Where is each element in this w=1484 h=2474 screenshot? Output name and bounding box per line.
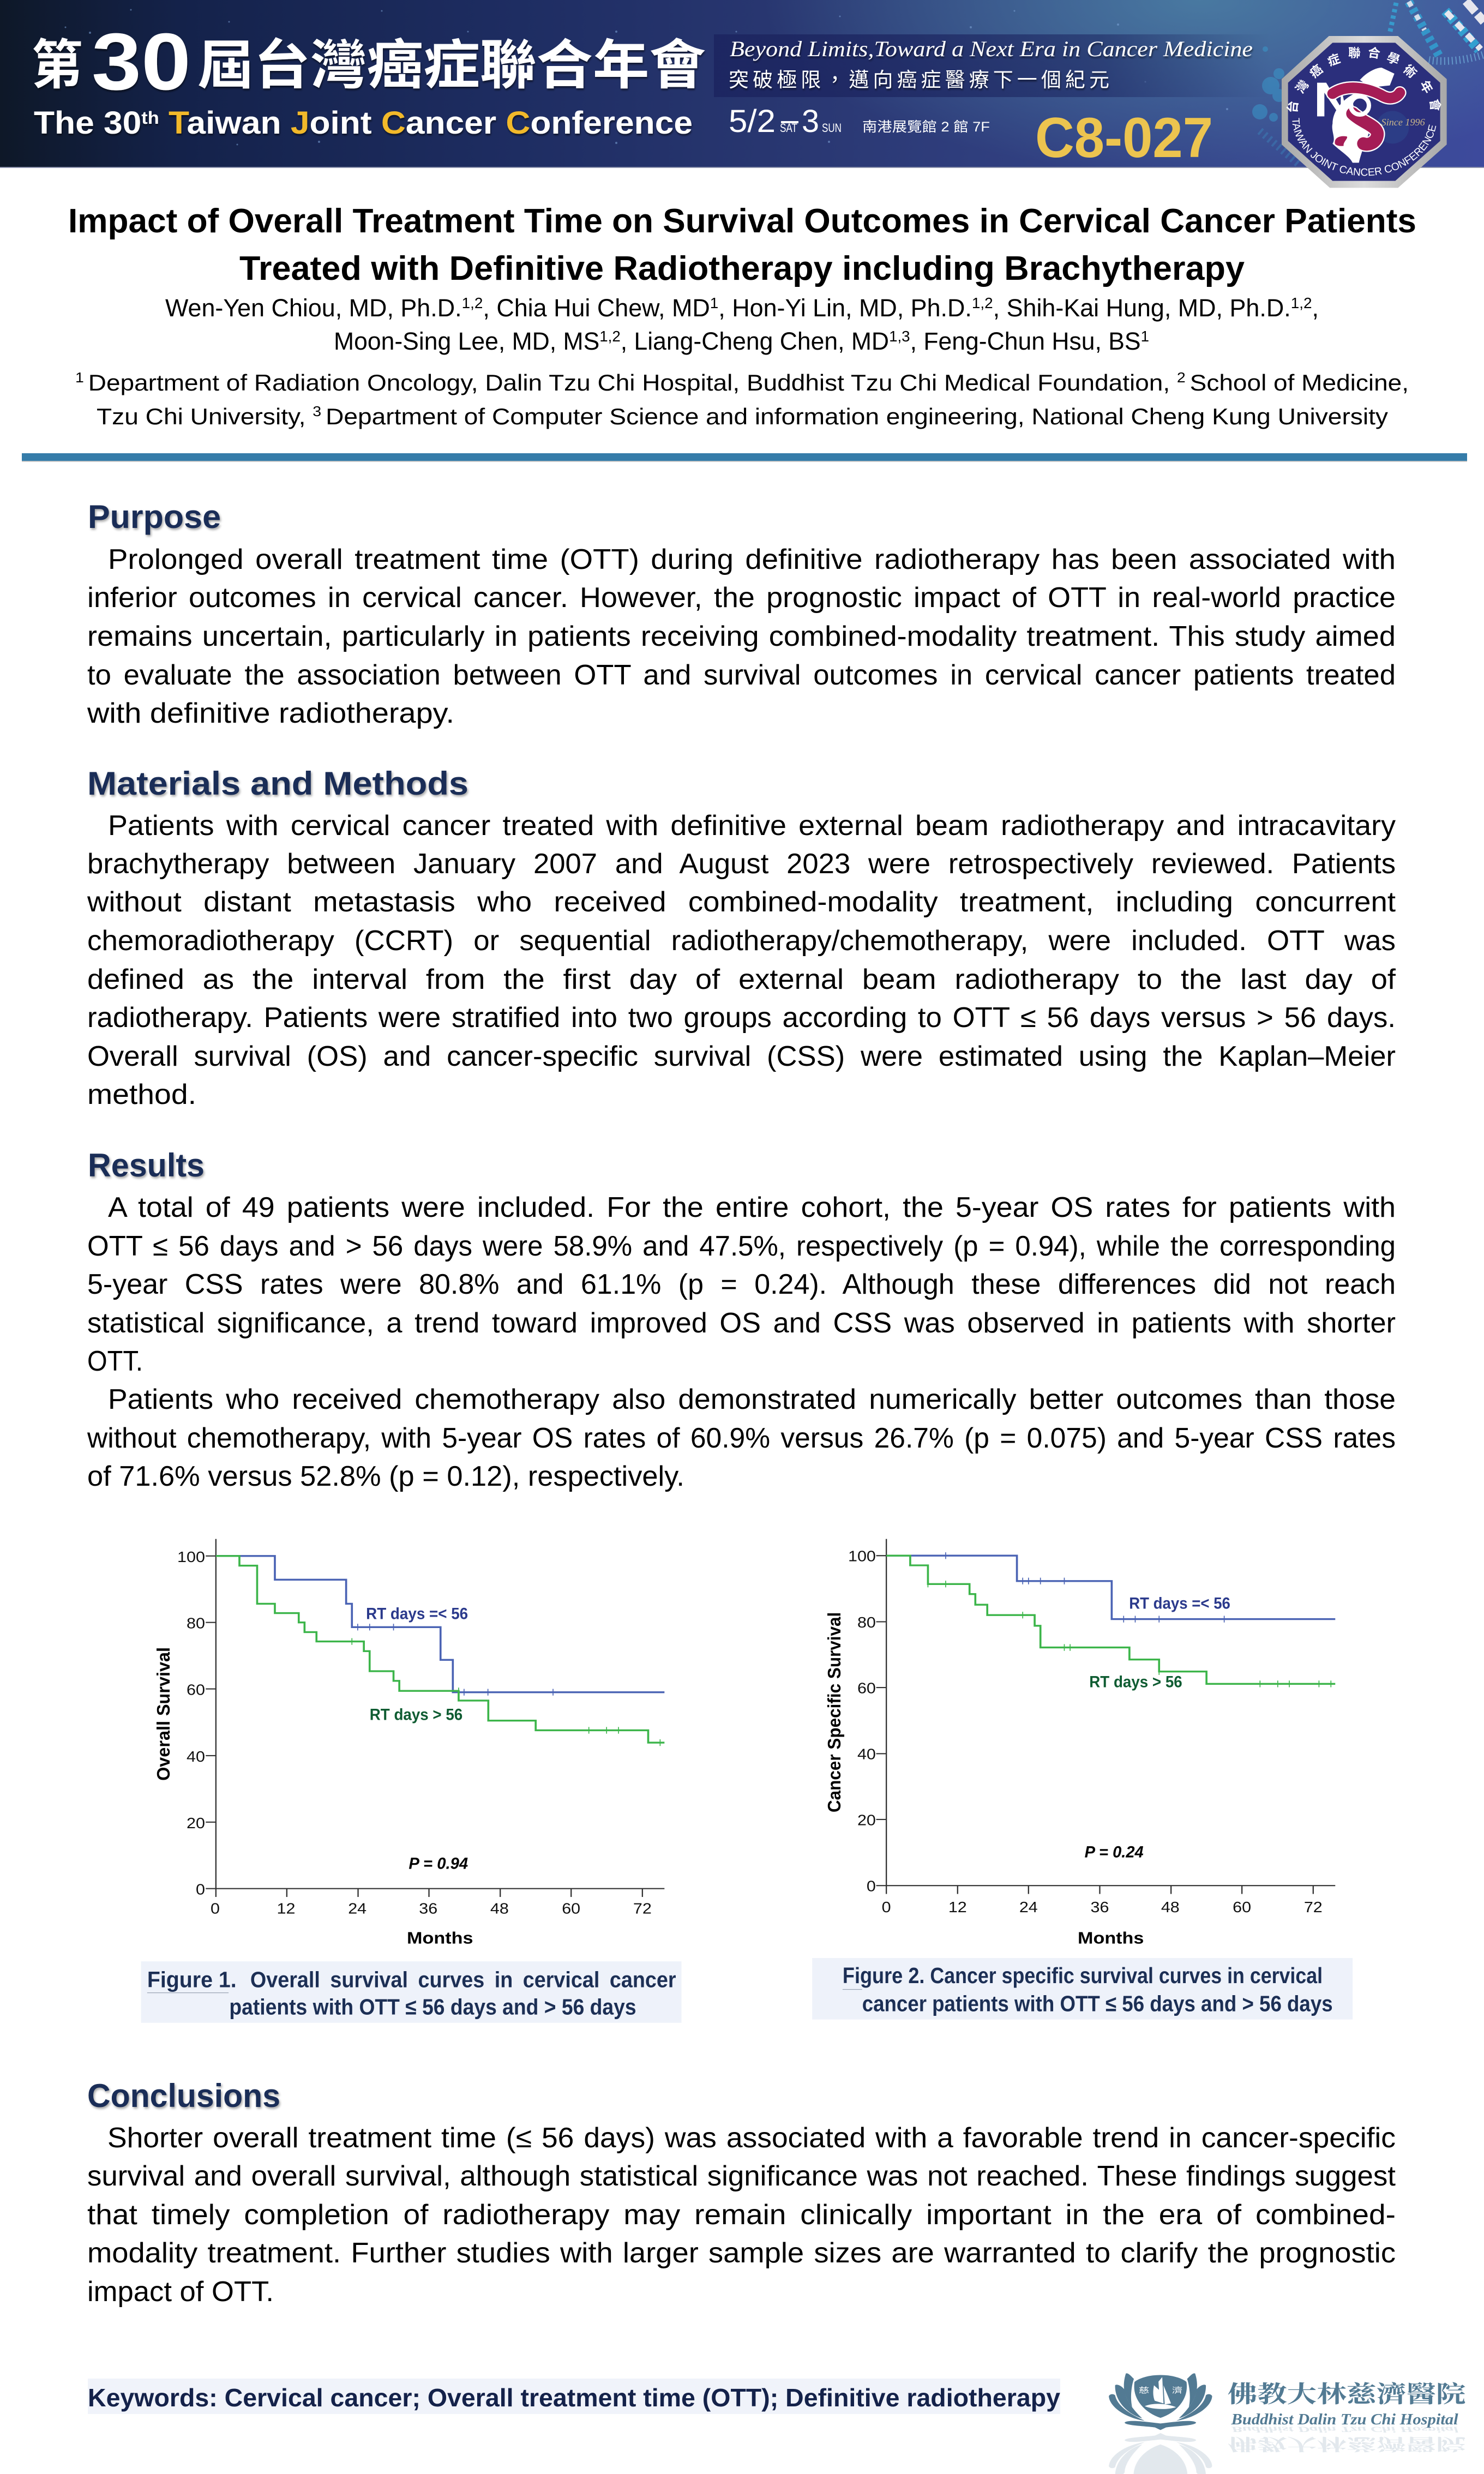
- axis title: Months, figure 2: Months: [1078, 1929, 1144, 1947]
- heading: Purpose: Purpose: [88, 499, 221, 535]
- text: Results: OTT ≤ 56 days and > 56 days were 58.9% and 47.5%, respectively (p = 0.94), while the corresponding: [87, 1230, 1396, 1262]
- label: RT days =< 56: RT days =< 56: [366, 1605, 468, 1623]
- text: Conclusions: that timely completion of radiotherapy may remain clinically important in the era of combined-: [87, 2199, 1396, 2231]
- p value: figure 2: P = 0.24: [1085, 1844, 1144, 1861]
- text: Purpose: inferior outcomes in cervical cancer. However, the prognostic impact of OTT in real-world practice: [87, 582, 1396, 614]
- tick labels: figure 2: 24: [1019, 1899, 1038, 1916]
- affiliations: [75, 369, 1409, 429]
- figure 2: cancer specific survival chart: [812, 1539, 1353, 2020]
- authors: [165, 294, 1319, 355]
- text: Conclusions: impact of OTT.: [87, 2276, 274, 2308]
- p value: figure 1: P = 0.94: [408, 1855, 468, 1872]
- logo ring text in Chinese: 灣: [1293, 77, 1312, 95]
- tick labels: figure 2: 48: [1161, 1899, 1180, 1916]
- label: RT days =< 56, figure 2: RT days =< 56: [1129, 1595, 1230, 1612]
- hospital logo: [1109, 2373, 1465, 2474]
- axis title: Months: Months: [407, 1929, 473, 1947]
- affiliations: Tzu Chi University, 3 Department of Computer Science and information engineering, National Cheng Kung University: [97, 403, 1388, 429]
- tick labels: figure 1: 48: [490, 1900, 509, 1917]
- label: RT days > 56, figure 2: RT days > 56: [1089, 1673, 1182, 1691]
- tick labels: figure 1: 12: [277, 1900, 296, 1917]
- tick labels: figure 1: 20: [187, 1815, 205, 1832]
- poster title: Impact of Overall Treatment Time on Survival Outcomes in Cervical Cancer Patients: [68, 202, 1416, 240]
- text: Results: Patients who received chemotherapy also demonstrated numerically better outcomes than those: [108, 1384, 1396, 1415]
- conference title in Chinese: 30: [92, 17, 191, 107]
- curve: RT days > 56, figure 2: [886, 1556, 1335, 1687]
- lotus emblem: [1109, 2373, 1212, 2430]
- affiliations: 1 Department of Radiation Oncology, Dalin Tzu Chi Hospital, Buddhist Tzu Chi Medical Foundation, 2 School of Medicine,: [75, 369, 1409, 395]
- logo ring text in Chinese: 會: [1427, 98, 1443, 112]
- text: Results: OTT.: [87, 1346, 143, 1377]
- text: Purpose: Prolonged overall treatment time (OTT) during definitive radiotherapy has been associated with: [108, 544, 1396, 575]
- text: Purpose: [87, 544, 1396, 729]
- caption band: figure 2: cancer patients with OTT ≤ 56 days and > 56 days: [862, 1991, 1333, 2016]
- text: Purpose: to evaluate the association between OTT and survival outcomes in cervical cancer patients treated: [87, 659, 1396, 691]
- logo ring text in Chinese: 台: [1285, 100, 1300, 113]
- conference title in English: The 30 th Taiwan Joint Cancer Conference: [34, 105, 693, 141]
- text: Materials and Methods: defined as the interval from the first day of external beam radiotherapy to the last day of: [87, 964, 1396, 995]
- text: Conclusions: [87, 2122, 1396, 2308]
- keywords band: Keywords: Cervical cancer; Overall treatment time (OTT); Definitive radiotherapy: [88, 2383, 1060, 2412]
- tick labels: figure 1: 100: [177, 1548, 205, 1566]
- caption band: figure 2: Cancer specific survival curves in cervical: [930, 1963, 1323, 1988]
- authors: Wen-Yen Chiou, MD, Ph.D.1,2, Chia Hui Chew, MD1, Hon-Yi Lin, MD, Ph.D.1,2, Shih-Kai Hung, MD, Ph.D.1,2,: [165, 294, 1319, 322]
- text: Materials and Methods: Overall survival (OS) and cancer-specific survival (CSS) were estimated using the Kaplan–Meier: [87, 1041, 1396, 1072]
- tick labels: figure 1: 72: [633, 1900, 652, 1917]
- logo ring text in Chinese: 年: [1417, 78, 1435, 96]
- label: RT days > 56: RT days > 56: [370, 1706, 462, 1724]
- conference theme box: 突破極限，邁向癌症醫療下一個紀元: [729, 69, 1109, 91]
- logo reflection: 佛教大林慈濟醫院: [1228, 2434, 1465, 2458]
- text: Materials and Methods: [87, 810, 1396, 1110]
- caption band: figure 1: Figure 1.: [147, 1967, 237, 1992]
- caption band: figure 1: [141, 1961, 681, 2023]
- conference theme box: Beyond Limits,Toward a Next Era in Cancer Medicine: [730, 37, 1253, 61]
- authors: Moon-Sing Lee, MD, MS1,2, Liang-Cheng Chen, MD1,3, Feng-Chun Hsu, BS1: [334, 327, 1149, 355]
- text: Results: [87, 1192, 1396, 1492]
- tick labels: figure 2: 40: [857, 1746, 876, 1763]
- hospital name in Chinese: 佛教大林慈濟醫院: [1228, 2375, 1465, 2409]
- conference logo: [1282, 36, 1447, 188]
- date and venue: SAT: [780, 121, 797, 135]
- tick labels: figure 1: 80: [187, 1615, 205, 1632]
- curve: RT days =< 56: [216, 1556, 664, 1696]
- logo ring text in Chinese: [1285, 45, 1443, 113]
- date and venue: [729, 104, 990, 139]
- poster title: Treated with Definitive Radiotherapy including Brachytherapy: [239, 250, 1245, 287]
- curve: RT days =< 56, figure 2: [886, 1552, 1335, 1623]
- caption band: figure 2: [812, 1958, 1353, 2020]
- tick labels: figure 2: 80: [857, 1614, 876, 1631]
- caption band: figure 1: patients with OTT ≤ 56 days and > 56 days: [229, 1995, 636, 2019]
- tick labels: figure 2: 36: [1091, 1899, 1109, 1916]
- text: Purpose: remains uncertain, particularly in patients receiving combined-modality treatment. This study aimed: [87, 621, 1396, 652]
- axis title: Overall Survival: Overall Survival: [153, 1647, 173, 1781]
- logo since text: Since 1996: [1381, 117, 1425, 128]
- text: Conclusions: modality treatment. Further studies with larger sample sizes are warranted to clarify the prognostic: [87, 2237, 1396, 2269]
- curve: RT days > 56: [216, 1556, 664, 1746]
- tick labels: figure 1: 40: [187, 1748, 205, 1766]
- text: Materials and Methods: without distant metastasis who received combined-modality treatment, including concurrent: [87, 886, 1396, 918]
- logo map and ribbon: [1317, 68, 1400, 163]
- text: Materials and Methods: brachytherapy between January 2007 and August 2023 were retrospectively reviewed. Patients: [87, 848, 1396, 880]
- logo ring text in Chinese: 症: [1326, 51, 1342, 69]
- conference title in Chinese: 屆台灣癌症聯合年會: [197, 35, 706, 95]
- lotus emblem: 濟: [1172, 2386, 1182, 2395]
- axis title: Cancer Specific Survival: Cancer Specific Survival: [824, 1612, 844, 1812]
- date and venue: 3: [802, 104, 819, 139]
- tick labels: figure 1: 36: [419, 1900, 437, 1917]
- text: Results: 5-year CSS rates were 80.8% and 61.1% (p = 0.24). Although these differences did not reach: [87, 1269, 1396, 1300]
- conference theme box: [714, 34, 1270, 97]
- text: Results: without chemotherapy, with 5-year OS rates of 60.9% versus 26.7% (p = 0.075) and 5-year CSS rates: [87, 1422, 1396, 1454]
- tick labels: figure 1: [177, 1548, 652, 1917]
- caption band: figure 2: Figure 2.: [843, 1963, 924, 1988]
- tick labels: figure 1: 0: [196, 1881, 205, 1898]
- text: Purpose: with definitive radiotherapy.: [87, 698, 454, 729]
- text: Results: statistical significance, a trend toward improved OS and CSS was observed in patients with shorter: [87, 1307, 1396, 1339]
- conference title in Chinese: [32, 17, 706, 107]
- date and venue: SUN: [822, 121, 842, 135]
- DNA helix decoration: [1252, 1, 1484, 164]
- figure 1: overall survival chart: [141, 1539, 681, 2023]
- heading: Materials and Methods: Materials and Methods: [87, 765, 468, 802]
- text: Materials and Methods: chemoradiotherapy (CCRT) or sequential radiotherapy/chemotherapy, were included. OTT was: [87, 925, 1396, 957]
- logo reflection: [1109, 2425, 1465, 2474]
- axes: figure 1: [206, 1539, 664, 1897]
- text: Materials and Methods: radiotherapy. Patients were stratified into two groups according to OTT ≤ 56 days versus > 56 days.: [87, 1002, 1396, 1034]
- tick labels: figure 2: 60: [1233, 1899, 1251, 1916]
- tick labels: figure 1: 0: [211, 1900, 220, 1917]
- logo ring text in Chinese: 合: [1367, 45, 1381, 61]
- text: Results: of 71.6% versus 52.8% (p = 0.12), respectively.: [87, 1461, 684, 1492]
- text: Conclusions: survival and overall survival, although statistical significance was not reached. These findings suggest: [87, 2160, 1396, 2192]
- date and venue: 南港展覽館 2 館 7F: [862, 119, 990, 135]
- logo ring text in Chinese: 聯: [1348, 46, 1361, 60]
- tick labels: figure 2: 60: [857, 1680, 876, 1697]
- heading: Conclusions: Conclusions: [87, 2077, 280, 2114]
- tick labels: figure 1: 60: [187, 1682, 205, 1698]
- tick labels: figure 2: [848, 1548, 1323, 1916]
- tick labels: figure 2: 72: [1304, 1899, 1323, 1916]
- tick labels: figure 1: 24: [348, 1900, 367, 1917]
- conference title in Chinese: 第: [32, 35, 83, 95]
- tick labels: figure 1: 60: [562, 1900, 580, 1917]
- logo ring text in Chinese: 術: [1401, 62, 1419, 81]
- conference header banner: [0, 0, 1484, 170]
- tick labels: figure 2: 20: [857, 1811, 876, 1829]
- tick labels: figure 2: 100: [848, 1548, 876, 1565]
- axes: figure 2: [876, 1539, 1335, 1894]
- tick labels: figure 2: 12: [948, 1899, 967, 1916]
- poster title: [68, 202, 1416, 287]
- text: Conclusions: Shorter overall treatment time (≤ 56 days) was associated with a favorable trend in cancer-specific: [107, 2122, 1396, 2154]
- caption band: figure 1: Overall survival curves in cervical cancer: [250, 1967, 676, 1992]
- logo ring text in English: TAIWAN JOINT CANCER CONFERENCE: [1292, 118, 1437, 176]
- heading: Results: Results: [88, 1147, 205, 1184]
- lotus emblem: 慈: [1139, 2386, 1149, 2395]
- tick labels: figure 2: 0: [882, 1899, 891, 1916]
- logo ring text in Chinese: 癌: [1307, 62, 1325, 81]
- tick labels: figure 2: 0: [867, 1878, 876, 1895]
- logo ring text in Chinese: 學: [1385, 50, 1402, 68]
- date and venue: 5/2: [729, 104, 776, 139]
- text: Materials and Methods: method.: [87, 1079, 196, 1110]
- text: Materials and Methods: Patients with cervical cancer treated with definitive external beam radiotherapy and intracavitary: [108, 810, 1396, 842]
- text: Results: A total of 49 patients were included. For the entire cohort, the 5-year OS rates for patients with: [108, 1192, 1396, 1223]
- poster number: C8-027: [1035, 106, 1213, 170]
